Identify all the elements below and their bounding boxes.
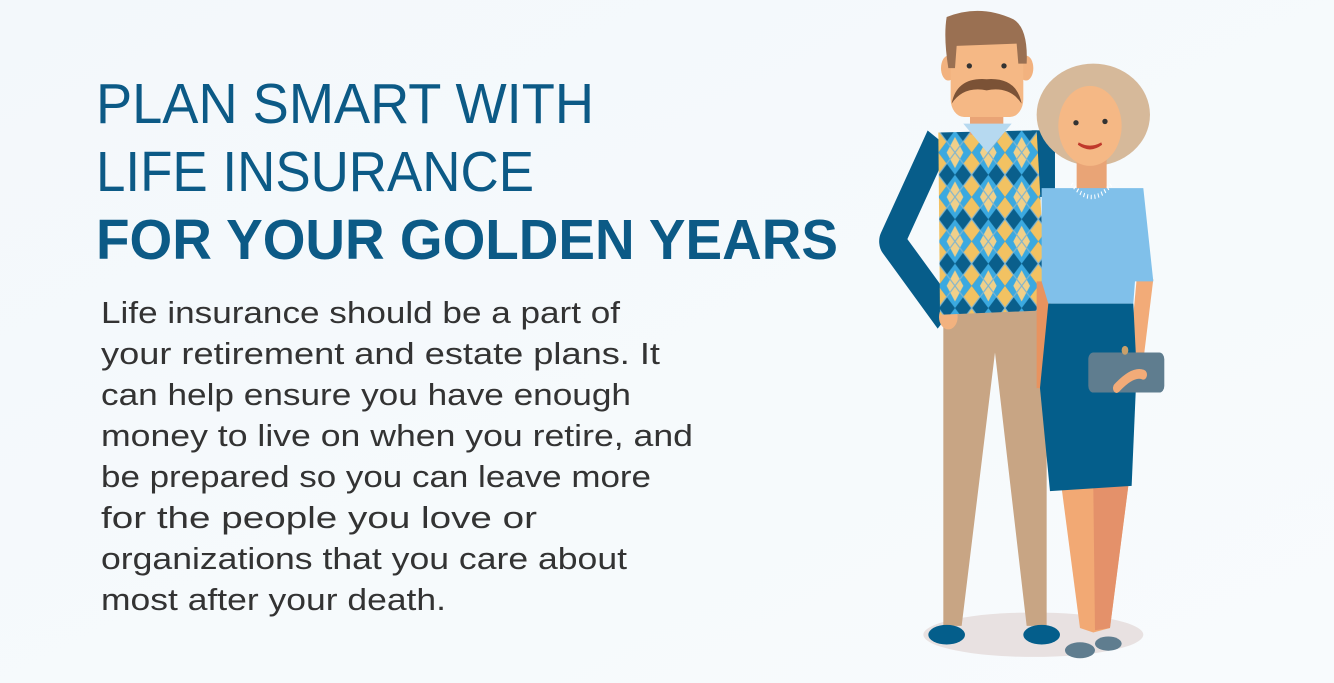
body text: money to live on when you retire, and <box>101 418 693 453</box>
title: FOR YOUR GOLDEN YEARS <box>96 208 838 272</box>
body text: for the people you love or <box>101 500 537 535</box>
man <box>892 11 1060 644</box>
body text: your retirement and estate plans. It <box>101 336 660 371</box>
illustration: couple <box>892 11 1164 658</box>
title: LIFE INSURANCE <box>96 140 534 204</box>
title: PLAN SMART WITH <box>96 72 594 136</box>
body text: most after your death. <box>101 582 446 617</box>
body text: can help ensure you have enough <box>101 377 631 412</box>
body text: be prepared so you can leave more <box>101 459 651 494</box>
woman <box>1037 64 1164 658</box>
body text <box>101 295 693 617</box>
title <box>96 72 838 272</box>
shadow <box>923 612 1143 657</box>
body text: organizations that you care about <box>101 541 627 576</box>
body text: Life insurance should be a part of <box>101 295 620 330</box>
